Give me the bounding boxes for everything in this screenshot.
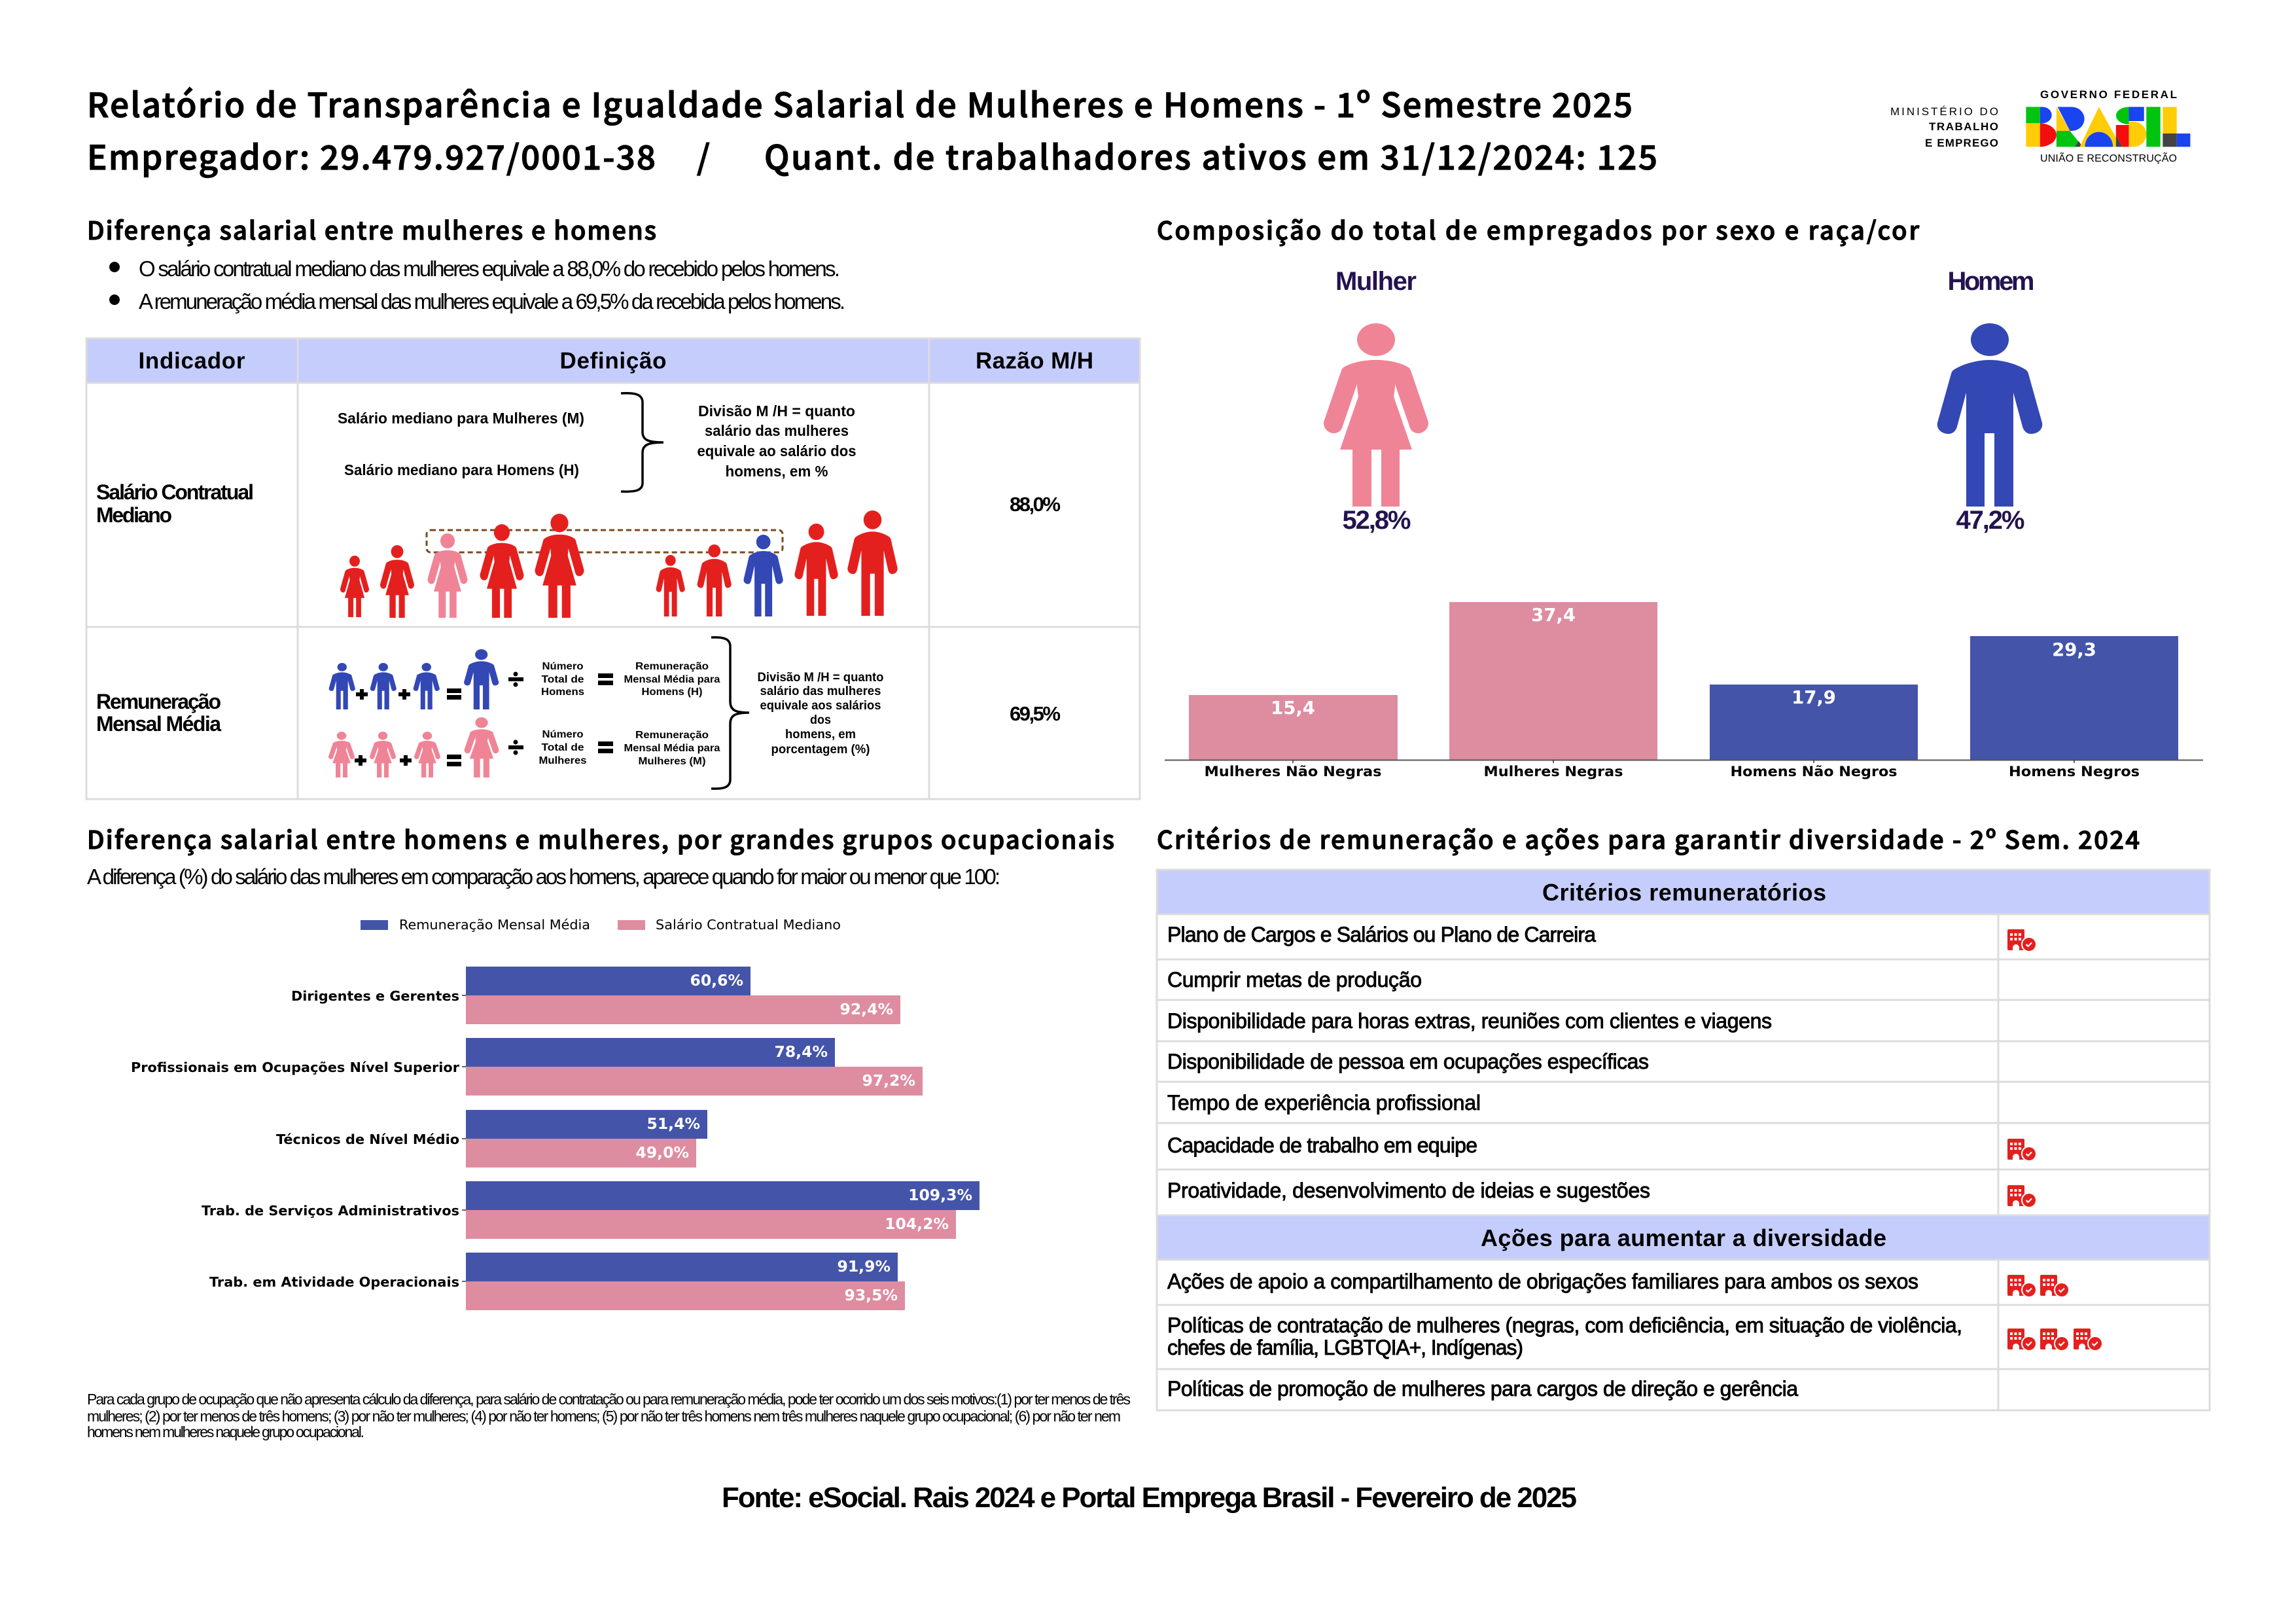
title: Relatório de Transparência e Igualdade Salarial de Mulheres e Homens - 1º Semestre 2025 — [87, 79, 1633, 127]
bar chart: sexo e raça/cor: 29,3 — [2052, 639, 2096, 660]
table header: Indicador — [139, 348, 245, 374]
panel: homem — [1937, 267, 2042, 535]
formula: women: Remuneração — [635, 730, 709, 741]
footnote: Para cada grupo de ocupação que não apresenta cálculo da diferença, para salário de contratação ou para remuneração média, pode ter ocorrido um dos seis motivos:(1) por ter menos de três — [87, 1391, 1131, 1408]
text: divisão M/H remuneração — [758, 671, 883, 757]
header: ações: Ações para aumentar a diversidade — [1481, 1224, 1886, 1251]
formula: men: Número — [542, 661, 584, 672]
source: Fonte: eSocial. Rais 2024 e Portal Emprega Brasil - Fevereiro de 2025 — [722, 1482, 1577, 1514]
criteria rows: Disponibilidade de pessoa em ocupações específicas — [1167, 1050, 1649, 1073]
heading: grupos ocupacionais: Diferença salarial entre homens e mulheres, por grandes grupos ocupacionais — [87, 820, 1114, 856]
panel: homem: 47,2% — [1956, 506, 2024, 535]
heading: critérios: Critérios de remuneração e ações para garantir diversidade - 2º Sem. 2024 — [1157, 820, 2140, 856]
criteria icons — [2007, 929, 2037, 1208]
value: 88,0%: 88,0% — [1010, 493, 1061, 516]
panel: mulher: Mulher — [1335, 267, 1417, 296]
criteria rows: Capacidade de trabalho em equipe — [1167, 1133, 1477, 1157]
group: profissionais: 78,4% — [774, 1043, 828, 1061]
footnote: homens nem mulheres naquele grupo ocupacional. — [87, 1423, 364, 1440]
group: serviços administrativos: 104,2% — [885, 1215, 949, 1233]
group: técnicos: 49,0% — [635, 1143, 689, 1162]
action rows: Políticas de contratação de mulheres (negras, com deficiência, em situação de violência, — [1167, 1313, 1962, 1337]
formula: women: Mulheres (M) — [639, 756, 705, 767]
logo: ministério do trabalho e emprego: MINISTÉRIO DO — [1890, 105, 1998, 118]
formula: women — [328, 717, 720, 777]
criteria rows — [1167, 923, 1772, 1202]
formula: men: Homens — [541, 687, 584, 698]
panel: homem: Homem — [1947, 267, 2035, 296]
text: divisão M/H remuneração: Divisão M /H = quanto — [758, 671, 883, 685]
criteria rows: Proatividade, desenvolvimento de ideias e sugestões — [1167, 1179, 1650, 1202]
group: profissionais: 97,2% — [862, 1071, 915, 1090]
text: divisão M/H mediano: homens, em % — [725, 463, 828, 480]
logo: ministério do trabalho e emprego — [1890, 105, 1998, 149]
panel: mulher — [1324, 267, 1428, 535]
panel: mulher: 52,8% — [1343, 506, 1411, 535]
bar chart: sexo e raça/cor: Mulheres Negras — [1484, 764, 1623, 779]
logo: ministério do trabalho e emprego: E EMPREGO — [1925, 137, 1998, 149]
group: dirigentes e gerentes: 92,4% — [839, 1000, 893, 1018]
bar chart: sexo e raça/cor: 17,9 — [1792, 687, 1836, 708]
group: atividade operacionais: 91,9% — [837, 1257, 891, 1275]
bar chart: sexo e raça/cor: Mulheres Não Negras — [1204, 764, 1382, 779]
title: Empregador: 29.479.927/0001-38 — [87, 131, 656, 179]
legend: Remuneração Mensal Média — [399, 917, 590, 933]
formula: men: Homens (H) — [641, 687, 703, 698]
row label: salário contratual mediano — [96, 480, 254, 527]
formula: men: Total de — [542, 674, 584, 685]
panel: indicators table — [86, 338, 1140, 799]
criteria rows: Disponibilidade para horas extras, reuniões com clientes e viagens — [1167, 1009, 1772, 1033]
row label: remuneração mensal média: Mensal Média — [96, 712, 221, 736]
group: serviços administrativos: 109,3% — [908, 1186, 972, 1204]
text: divisão M/H remuneração: salário das mulheres — [760, 685, 881, 698]
header: critérios remuneratórios: Critérios remuneratórios — [1542, 879, 1826, 906]
definition: salário mediano labels: Salário mediano para Mulheres (M) — [338, 410, 584, 427]
row label: remuneração mensal média — [96, 690, 221, 736]
legend — [361, 917, 841, 933]
group: dirigentes e gerentes — [291, 967, 900, 1024]
text: divisão M/H mediano: salário das mulheres — [705, 422, 849, 439]
group: serviços administrativos: Trab. de Serviços Administrativos — [202, 1203, 459, 1219]
icons: men ordered by salary — [656, 510, 898, 616]
group: dirigentes e gerentes: 60,6% — [690, 971, 743, 990]
formula: men — [329, 649, 720, 709]
text: divisão M/H remuneração: porcentagem (%) — [771, 743, 870, 757]
action rows: chefes de família, LGBTQIA+, Indígenas) — [1167, 1336, 1523, 1359]
group: profissionais: Profissionais em Ocupações Nível Superior — [131, 1060, 460, 1075]
bullet list — [109, 257, 845, 313]
logo: governo federal brasil: GOVERNO FEDERAL — [2040, 88, 2177, 101]
heading: diferença salarial: Diferença salarial entre mulheres e homens — [87, 211, 656, 247]
table header — [139, 348, 1093, 374]
bar chart: grupos ocupacionais — [131, 967, 980, 1310]
table header: Definição — [560, 348, 666, 374]
panel: criteria table — [1157, 870, 2210, 1410]
formula: women: Mulheres — [539, 755, 587, 766]
text: divisão M/H mediano: Divisão M /H = quanto — [698, 402, 855, 419]
group: técnicos — [276, 1110, 707, 1168]
bar chart: sexo e raça/cor: Homens Não Negros — [1730, 764, 1898, 779]
definition: salário mediano labels: Salário mediano para Homens (H) — [344, 461, 579, 478]
group: técnicos: 51,4% — [646, 1115, 700, 1133]
group: atividade operacionais: 93,5% — [844, 1286, 898, 1304]
definition: salário mediano labels — [338, 410, 584, 478]
formula: women: Total de — [542, 742, 584, 753]
group: serviços administrativos — [202, 1181, 980, 1239]
formula: women: Mensal Média para — [624, 743, 720, 754]
formula: men: Remuneração — [635, 661, 709, 672]
action rows — [1167, 1270, 1962, 1400]
formula: men: Mensal Média para — [624, 674, 720, 685]
legend: Salário Contratual Mediano — [656, 917, 841, 933]
subtitle: grupos ocupacionais: A diferença (%) do salário das mulheres em comparação aos homens, aparece quando for maior ou menor que 100: — [87, 865, 1000, 889]
icons: women ordered by salary — [340, 514, 584, 618]
bar chart: sexo e raça/cor: 37,4 — [1531, 605, 1576, 626]
title: Quant. de trabalhadores ativos em 31/12/2024: 125 — [764, 131, 1657, 179]
value: 69,5%: 69,5% — [1010, 702, 1061, 725]
criteria rows: Tempo de experiência profissional — [1167, 1091, 1481, 1115]
table header: Razão M/H — [976, 348, 1093, 374]
brace: salário mediano — [621, 393, 663, 491]
footnote: mulheres; (2) por ter menos de três homens; (3) por não ter mulheres; (4) por não ter homens; (5) por não ter três homens nem três mulheres naquele grupo ocupacional; (6) por não ter nem — [87, 1408, 1121, 1425]
group: dirigentes e gerentes: Dirigentes e Gerentes — [291, 988, 459, 1004]
logo: ministério do trabalho e emprego: TRABALHO — [1929, 120, 1998, 133]
criteria rows: Cumprir metas de produção — [1167, 968, 1422, 991]
heading: composição: Composição do total de empregados por sexo e raça/cor — [1157, 211, 1919, 247]
title: / — [697, 131, 710, 179]
text: divisão M/H remuneração: equivale aos salários — [760, 699, 881, 713]
bar chart: sexo e raça/cor — [1165, 602, 2203, 779]
footnote — [87, 1391, 1131, 1440]
formula: women: Número — [542, 729, 584, 740]
row label: salário contratual mediano: Salário Contratual — [96, 480, 254, 504]
logo: governo federal brasil — [2026, 88, 2190, 164]
text: divisão M/H remuneração: homens, em — [785, 728, 856, 741]
text: divisão M/H remuneração: dos — [810, 713, 831, 727]
group: atividade operacionais — [209, 1253, 905, 1310]
action icons — [2007, 1275, 2103, 1351]
brace: remuneração — [711, 637, 749, 789]
group: profissionais — [131, 1038, 923, 1096]
bar chart: sexo e raça/cor: Homens Negros — [2009, 764, 2140, 779]
text: divisão M/H mediano — [698, 402, 856, 480]
group: técnicos: Técnicos de Nível Médio — [276, 1132, 459, 1147]
row label: salário contratual mediano: Mediano — [96, 503, 172, 527]
criteria rows: Plano de Cargos e Salários ou Plano de Carreira — [1167, 923, 1596, 946]
action rows: Ações de apoio a compartilhamento de obrigações familiares para ambos os sexos — [1167, 1270, 1918, 1293]
dashed median highlight — [427, 530, 783, 552]
row label: remuneração mensal média: Remuneração — [96, 690, 221, 713]
group: atividade operacionais: Trab. em Atividade Operacionais — [209, 1274, 459, 1290]
bullet list: A remuneração média mensal das mulheres equivale a 69,5% da recebida pelos homens. — [139, 289, 845, 313]
bullet list: O salário contratual mediano das mulheres equivale a 88,0% do recebido pelos homens. — [139, 257, 840, 281]
logo: governo federal brasil: UNIÃO E RECONSTRUÇÃO — [2040, 151, 2177, 164]
bar chart: sexo e raça/cor: 15,4 — [1271, 698, 1315, 719]
action rows: Políticas de promoção de mulheres para cargos de direção e gerência — [1167, 1377, 1798, 1400]
title — [87, 79, 1657, 179]
text: divisão M/H mediano: equivale ao salário dos — [698, 442, 856, 459]
